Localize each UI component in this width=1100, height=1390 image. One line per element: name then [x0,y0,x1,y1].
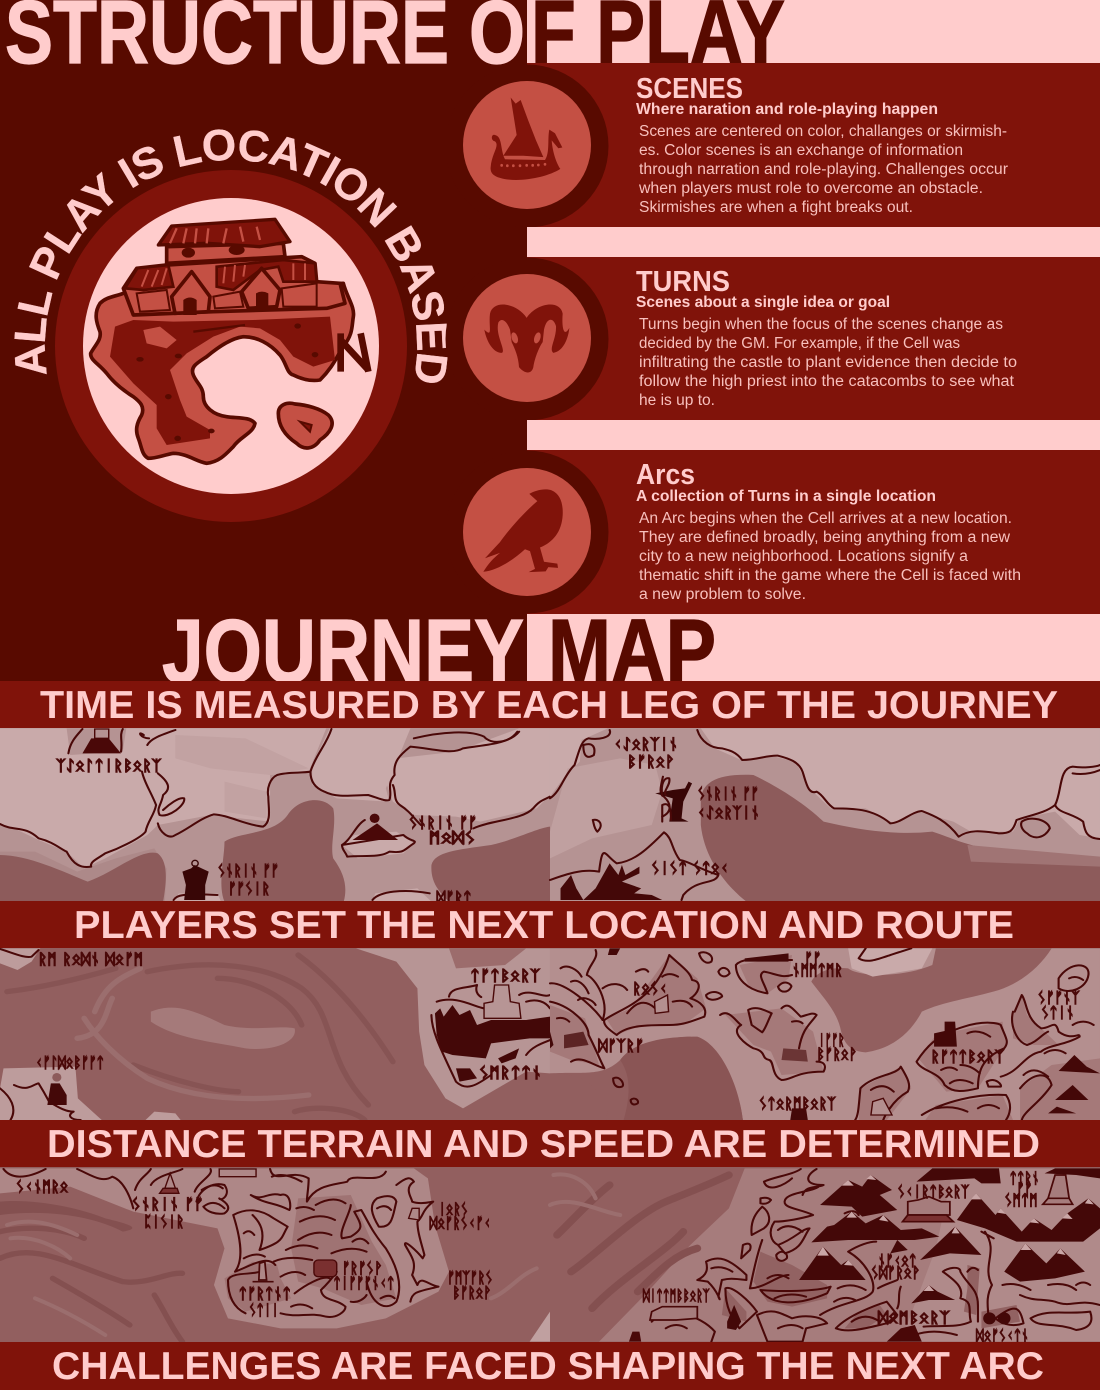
map section: lower: ᛊᚾᚱᛁᚾ ᚠᚠ [132,1195,203,1213]
illustration: island with buildings [91,219,368,463]
arcs text: An Arc begins when the Cell arrives at a new location. [639,510,1012,527]
icon: lighthouse [47,1073,67,1105]
map section: lower: ᛞᛟᚠᚱᛊᚲᚠᚲ [430,1214,491,1232]
lower building row [123,257,345,315]
icon: viking ship [463,81,591,209]
curved heading: ALL PLAY IS LOCATION BASED [14,129,448,383]
map section: lower: ᚾᚠᚲᛟᛏ [878,1252,917,1270]
map section: middle: ᛞᚠᛉᚱᚠ [598,1037,644,1055]
turns text [636,266,1017,409]
turns text: follow the high priest into the catacombs to see what [639,373,1015,390]
map section: middle [0,948,1100,1120]
title: journey map: JOURNEY [162,602,524,702]
panel: all play is location based [14,129,448,522]
map section: lower: ᚠᚱᚠᛊᚹ [342,1259,382,1277]
map section: middle: ᚾᛗᛗᛏᛗᚱ [792,961,843,979]
circle backing [446,64,608,228]
icon: raven [463,468,591,596]
icon: pyramid shrine [353,814,398,840]
map section: lower [0,1167,1100,1345]
map section: middle: ᛊᚠᚠᚾᛉ [1038,989,1080,1006]
map section: middle: ᚠᚠ [804,950,821,967]
band: challenges are faced: CHALLENGES ARE FACED SHAPING THE NEXT ARC [52,1345,1044,1388]
map section: lower: ᛊᛗᛏᛗ [1004,1191,1038,1209]
scenes text [636,73,1008,216]
map section: upper: ᛞᚠᚱᛏ [437,889,472,906]
turns text: Turns begin when the focus of the scenes change as [639,316,1003,333]
map section: upper: ᚲᛇᛟᚱᛉᛁᚾ [613,735,678,753]
scenes text: Scenes are centered on color, challanges or skirmish- [639,123,1007,140]
map section: lower: ᛒᚠᚱᛟᚹ [452,1284,491,1301]
turns text: he is up to. [639,392,715,409]
map section: upper: ᛗᛟᛞᛊ [429,829,476,846]
map section: middle: ᛊᛏᛟᚱᛗᛒᛟᚱᛉ [759,1095,836,1112]
icon: hall [650,1307,697,1320]
map section: middle: ᛊᛏᛁᚾ [1041,1004,1074,1021]
scenes text: Where naration and role-playing happen [636,101,938,118]
title: structure of play [5,0,1100,83]
map section: middle: ᚱᚠᛏᛏᛒᛟᚱᛉ [931,1048,1004,1065]
arcs text: a new problem to solve. [639,586,806,603]
map section: lower: ᛊᛞᚠᚱᛟᚹ [871,1264,920,1281]
map section: upper: ᛊᚾᚱᛁᚾ ᚠᚠ [409,814,477,831]
turns text: infiltrating the castle to plant evidence then decide to [639,354,1017,371]
arcs text [636,459,1021,603]
arcs text: city to a new neighborhood. Locations signify a [639,548,968,565]
scenes text: when players must role to overcome an obstacle. [638,180,983,197]
circle backing [446,450,608,614]
map section: lower: ᛞᛟᚠᛊᚲᛏᚾ [976,1327,1029,1345]
map section: upper: ᛊᚾᚱᛁᚾ ᚠᚠ [697,785,759,802]
map section: lower: ᛊᛏᛁᛁ [249,1301,279,1319]
icon: ram skull [463,274,591,402]
icon: dark forest [561,863,662,900]
circle backing [446,258,608,420]
map section: middle: ᚲᚠᛚᛞᛟᛒᚠᚠᛏ [35,1054,104,1071]
arcs text: Arcs [636,459,695,491]
icon: castle island [431,985,550,1087]
panel: arcs [446,450,1100,614]
title: journey map: MAP [548,602,716,702]
turns text: TURNS [636,266,730,298]
map section: upper [0,728,1100,906]
panel: scenes [446,63,1100,228]
rune mark [341,333,368,372]
map section: lower: ᛊᚲᚾᛗᚱᛟ [16,1178,68,1196]
title: journey map [162,602,1100,702]
map section: lower: ᚠᚠ [1017,1180,1032,1198]
icon: tower [82,729,121,753]
turns text: decided by the GM. For example, if the Cell was [639,335,960,352]
map section: middle: ᛊᛗᚱᛏᛏᚾ [479,1064,542,1081]
map section: middle: ᚱᛟᛊᚲ [632,980,668,997]
panel: turns [446,257,1100,420]
icon: statue [655,782,692,822]
arcs text: A collection of Turns in a single location [636,488,936,505]
arcs text: They are defined broadly, being anything from a new [639,529,1011,546]
map section: lower: ᛈᛁᛊᛁᚱ [144,1213,184,1230]
arcs text: thematic shift in the game where the Cell is faced with [639,567,1021,584]
map section: lower: ᚠᛗᛉᚠᚱᛊ [447,1269,493,1286]
map section: upper: ᚲᛇᛟᚱᛉᛁᚾ [697,804,760,821]
scenes text: es. Color scenes is an exchange of information [639,142,963,159]
map section: lower: ᛞᛁᛏᛏᛗᛒᛒᛟᚱᛉ [643,1287,710,1305]
icon: mountain range [727,1168,1100,1330]
icon: shrine [160,1173,179,1193]
icon: keep and houses [550,948,957,1120]
map section: middle: ᛏᚠᛏᛒᛟᚱᛉ [470,967,540,985]
map section: lower: ᛁᛟᚱᛊ [438,1200,468,1218]
map section: upper: ᛊᛁᛊᛏ ᛊᛏᛟᚲ [651,859,729,877]
band: players set the next location: PLAYERS SET THE NEXT LOCATION AND ROUTE [74,904,1014,947]
map section: upper: ᛉᛇᛟᛚᛏᛁᚱᛒᛟᚱᛉ [56,757,161,775]
scenes text: SCENES [636,73,743,105]
icon: standing stone [253,1262,274,1282]
icon: mountains [1048,1055,1100,1113]
scenes text: through narration and role-playing. Challenges occur [639,161,1008,178]
map section: middle: ᛒᚠᚱᛟᚹ [817,1045,857,1063]
band: distance terrain and speed: DISTANCE TERRAIN AND SPEED ARE DETERMINED [47,1123,1040,1166]
map section: upper: ᛒᚠᚱᛟᚹ [627,753,675,771]
map section: lower: ᛞᛟᛗᛒᛟᚱᛉ [878,1309,950,1326]
map section: lower: ᛊᚲᛁᚱᛏᛒᛟᚱᛉ [897,1183,969,1200]
small islet [278,403,332,448]
map section: lower: ᛏᛏᚱᚾ [1009,1169,1039,1187]
turns text: Scenes about a single idea or goal [636,294,890,311]
scenes text: Skirmishes are when a fight breaks out. [639,199,913,216]
map section: middle: ᚱᛗ ᚱᛟᛞᚾ ᛞᛟᚠᛗ [38,950,143,968]
icon: praying figure [182,860,209,900]
icon: chest [314,1260,337,1277]
icon: fortress [903,1197,953,1222]
houses [172,272,210,313]
upper building [167,243,285,263]
medallion ring [55,170,407,522]
map section: lower: ᛏᛁᚠᚠᚠᚾᚲᛏ [333,1274,395,1292]
band: time is measured: TIME IS MEASURED BY EACH LEG OF THE JOURNEY [40,684,1058,727]
medallion centre [83,198,379,494]
map section: lower: ᛏᚠᚱᛏᚾᛏ [239,1285,291,1302]
icon: striped tower [1043,1175,1073,1204]
map section: middle: ᛁᚠᚠᚱ [818,1031,845,1049]
map section: upper: ᚠᚠᛊᛁᚱ [228,880,270,897]
map section: upper: ᛊᚾᚱᛁᚾ ᚠᚠ [217,862,279,880]
